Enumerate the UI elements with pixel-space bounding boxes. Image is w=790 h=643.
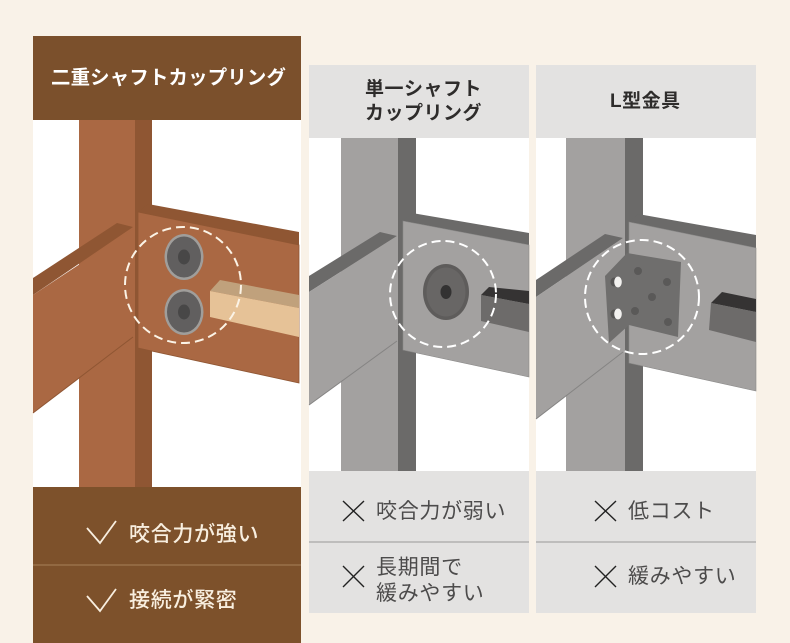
illustration: grey single shaft joint <box>309 138 529 471</box>
benefit: strong bite: 咬合力が強い <box>129 523 259 546</box>
illustration: brown double shaft joint <box>33 120 301 487</box>
illustration: grey L bracket joint <box>536 138 756 471</box>
drawback: weak bite: 咬合力が弱い <box>376 500 506 523</box>
icon: cross mark <box>595 566 616 587</box>
heading: double shaft coupling: 二重シャフトカップリング <box>51 66 286 89</box>
callout: dashed highlight circle <box>125 227 241 343</box>
footer: L bracket drawbacks <box>536 471 756 613</box>
icon: cross mark <box>595 501 616 521</box>
square shaft end <box>481 287 529 332</box>
drawback: low cost: 低コスト <box>628 500 715 523</box>
heading: L bracket <box>536 65 756 138</box>
icon: check mark <box>87 521 116 543</box>
wooden shaft end <box>210 280 299 337</box>
icon: lower bolt <box>164 289 204 335</box>
footer: double shaft benefits <box>33 487 301 643</box>
panel: double shaft coupling <box>33 36 301 643</box>
heading: double shaft coupling <box>33 36 301 120</box>
heading: single shaft coupling <box>309 65 529 138</box>
callout: dashed highlight circle <box>585 240 699 354</box>
heading: single shaft coupling: 単一シャフト <box>365 78 482 100</box>
icon: cross mark <box>343 501 364 521</box>
icon: L bracket with holes <box>605 253 681 343</box>
icon: cross mark <box>343 566 364 587</box>
drawback: loosens over time: 緩みやすい <box>376 582 484 605</box>
panel: single shaft coupling <box>309 65 529 613</box>
icon: single bolt <box>423 264 469 320</box>
footer: single shaft drawbacks <box>309 471 529 613</box>
icon: upper bolt <box>164 234 204 280</box>
drawback: loosens over time <box>376 556 484 605</box>
square shaft end <box>709 292 756 342</box>
heading: L bracket: L型金具 <box>610 90 681 112</box>
heading: single shaft coupling: カップリング <box>365 101 482 124</box>
benefit: tight connection: 接続が緊密 <box>129 589 238 612</box>
callout: dashed highlight circle <box>390 241 496 347</box>
panel: L bracket <box>536 65 756 613</box>
drawback: loosens over time: 長期間で <box>376 556 463 579</box>
drawback: loosens easily: 緩みやすい <box>628 565 736 588</box>
icon: check mark <box>87 589 116 611</box>
